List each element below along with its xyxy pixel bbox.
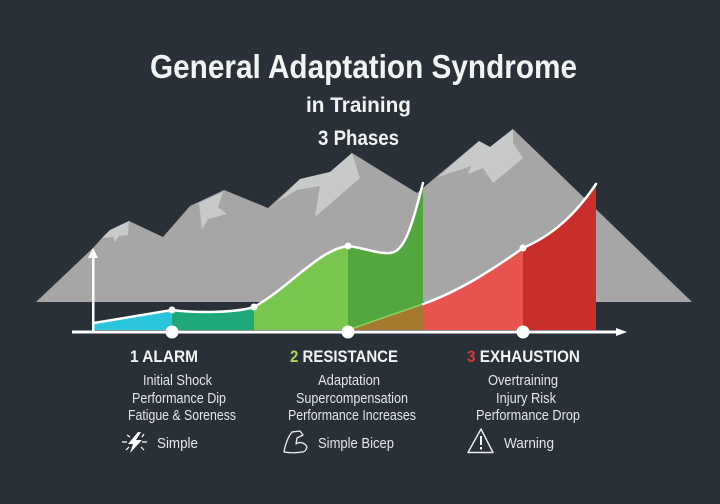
heading: alarm: 1 ALARM: [130, 347, 198, 366]
heading: exhaustion: 3 EXHAUSTION: [467, 347, 580, 366]
exhaustion list: Overtraining: [488, 373, 558, 389]
title: 3 Phases: [318, 127, 399, 150]
icon: warning: [468, 429, 493, 452]
alarm list: [128, 373, 236, 424]
exhaustion list: [476, 373, 580, 424]
phase 1: alarm: [122, 347, 236, 453]
title: in Training: [306, 94, 411, 117]
exhaustion area: [348, 184, 596, 330]
resistance list: [288, 373, 416, 424]
resistance list: Supercompensation: [296, 391, 408, 407]
icon: bicep: [284, 431, 307, 453]
title: General Adaptation Syndrome: [150, 48, 577, 85]
resistance list: Adaptation: [318, 373, 380, 389]
icon label: simple: Simple: [157, 436, 198, 452]
heading: resistance: 2 RESISTANCE: [290, 347, 398, 366]
alarm list: Initial Shock: [143, 373, 213, 389]
axes: [72, 248, 627, 336]
title: [150, 48, 577, 150]
alarm list: Fatigue & Soreness: [128, 408, 236, 424]
phase markers: [166, 242, 530, 338]
exhaustion list: Performance Drop: [476, 408, 580, 424]
performance chart: [72, 183, 627, 338]
icon label: simple bicep: Simple Bicep: [318, 436, 394, 452]
alarm list: Performance Dip: [132, 391, 226, 407]
mountain range: [36, 129, 692, 302]
alarm area: [94, 307, 254, 330]
phase 3: exhaustion: [467, 347, 580, 452]
resistance area: [254, 183, 423, 330]
icon label: warning: Warning: [504, 436, 554, 452]
performance curves: [94, 183, 596, 323]
resistance list: Performance Increases: [288, 408, 416, 424]
icon: lightning: [122, 432, 147, 453]
phase 2: resistance: [284, 347, 416, 453]
exhaustion list: Injury Risk: [496, 391, 557, 407]
